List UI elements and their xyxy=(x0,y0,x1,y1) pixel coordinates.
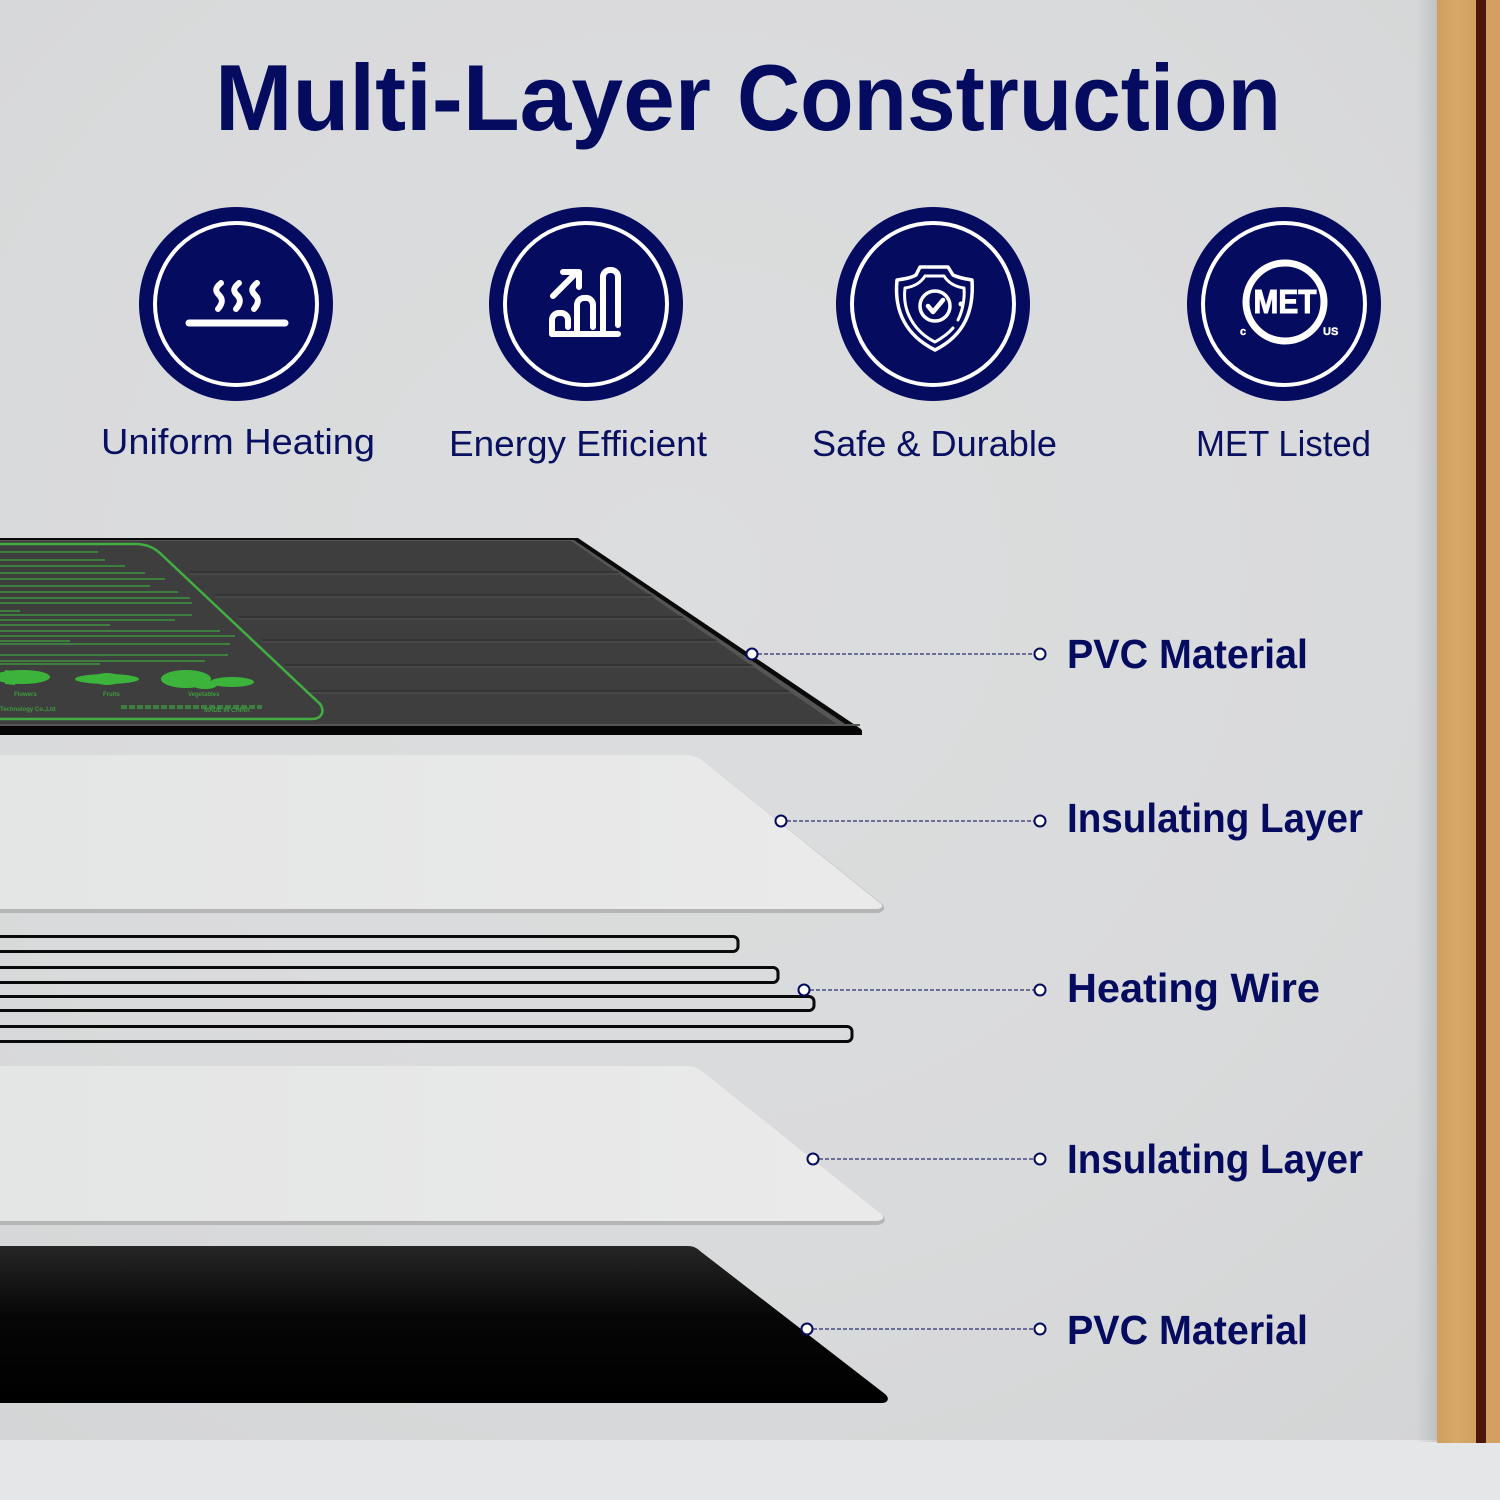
title xyxy=(215,45,1281,150)
dot on shield xyxy=(958,302,964,306)
floor xyxy=(0,1440,1500,1500)
icon: MET listed badge xyxy=(1187,207,1381,401)
wooden door frame xyxy=(1437,0,1500,1443)
callout: insulating layer upper: Insulating Layer xyxy=(1067,795,1363,841)
feature: safe and durable xyxy=(812,207,1057,464)
icon: safe and durable badge xyxy=(836,207,1030,401)
pictogram captions xyxy=(0,692,251,714)
icon: MET listed badge: US xyxy=(1323,326,1338,338)
mat crease lines xyxy=(190,572,820,693)
layer: heating wire xyxy=(0,936,852,1042)
label: safe and durable: Safe & Durable xyxy=(812,423,1057,464)
plant pictograms xyxy=(0,670,254,689)
icon: energy efficient badge xyxy=(489,207,683,401)
green print outline xyxy=(0,544,322,719)
pictogram captions: Vegetables xyxy=(188,692,220,698)
pictogram captions: Fruits xyxy=(103,692,120,698)
icon: MET listed badge: c xyxy=(1240,326,1246,338)
icon: uniform heating badge xyxy=(139,207,333,401)
callout: insulating layer lower xyxy=(808,1136,1363,1182)
callout: insulating layer upper xyxy=(776,795,1363,841)
layer: bottom PVC mat xyxy=(0,1246,888,1403)
pictogram captions: Technology Co.,Ltd xyxy=(0,707,56,713)
label: energy efficient: Energy Efficient xyxy=(449,423,707,464)
label: uniform heating: Uniform Heating xyxy=(101,421,375,462)
feature: energy efficient xyxy=(449,207,707,464)
icon: MET listed badge: MET xyxy=(1254,283,1316,320)
title: Construction xyxy=(737,45,1281,150)
certification marks xyxy=(121,705,262,709)
feature: uniform heating xyxy=(101,207,375,462)
callout: heating wire: Heating Wire xyxy=(1067,965,1320,1011)
callout: PVC material bottom: PVC Material xyxy=(1067,1307,1308,1353)
label: MET listed: MET Listed xyxy=(1196,423,1371,464)
callout: PVC material bottom xyxy=(802,1307,1308,1353)
layer: lower insulating sheet xyxy=(0,1066,885,1225)
callout: PVC material top xyxy=(746,631,1308,677)
instruction print block xyxy=(0,552,235,664)
feature: MET listed xyxy=(1187,207,1381,464)
layer: top PVC mat xyxy=(0,538,862,735)
pictogram captions: Flowers xyxy=(14,692,37,698)
callout: insulating layer lower: Insulating Layer xyxy=(1067,1136,1363,1182)
layer: upper insulating sheet xyxy=(0,755,884,913)
wall shadow beside wooden post xyxy=(1415,0,1437,1442)
pictogram captions: MADE IN CHINA xyxy=(204,708,251,714)
callout: heating wire xyxy=(798,965,1320,1011)
callout: PVC material top: PVC Material xyxy=(1067,631,1308,677)
title: Multi-Layer xyxy=(215,45,711,150)
